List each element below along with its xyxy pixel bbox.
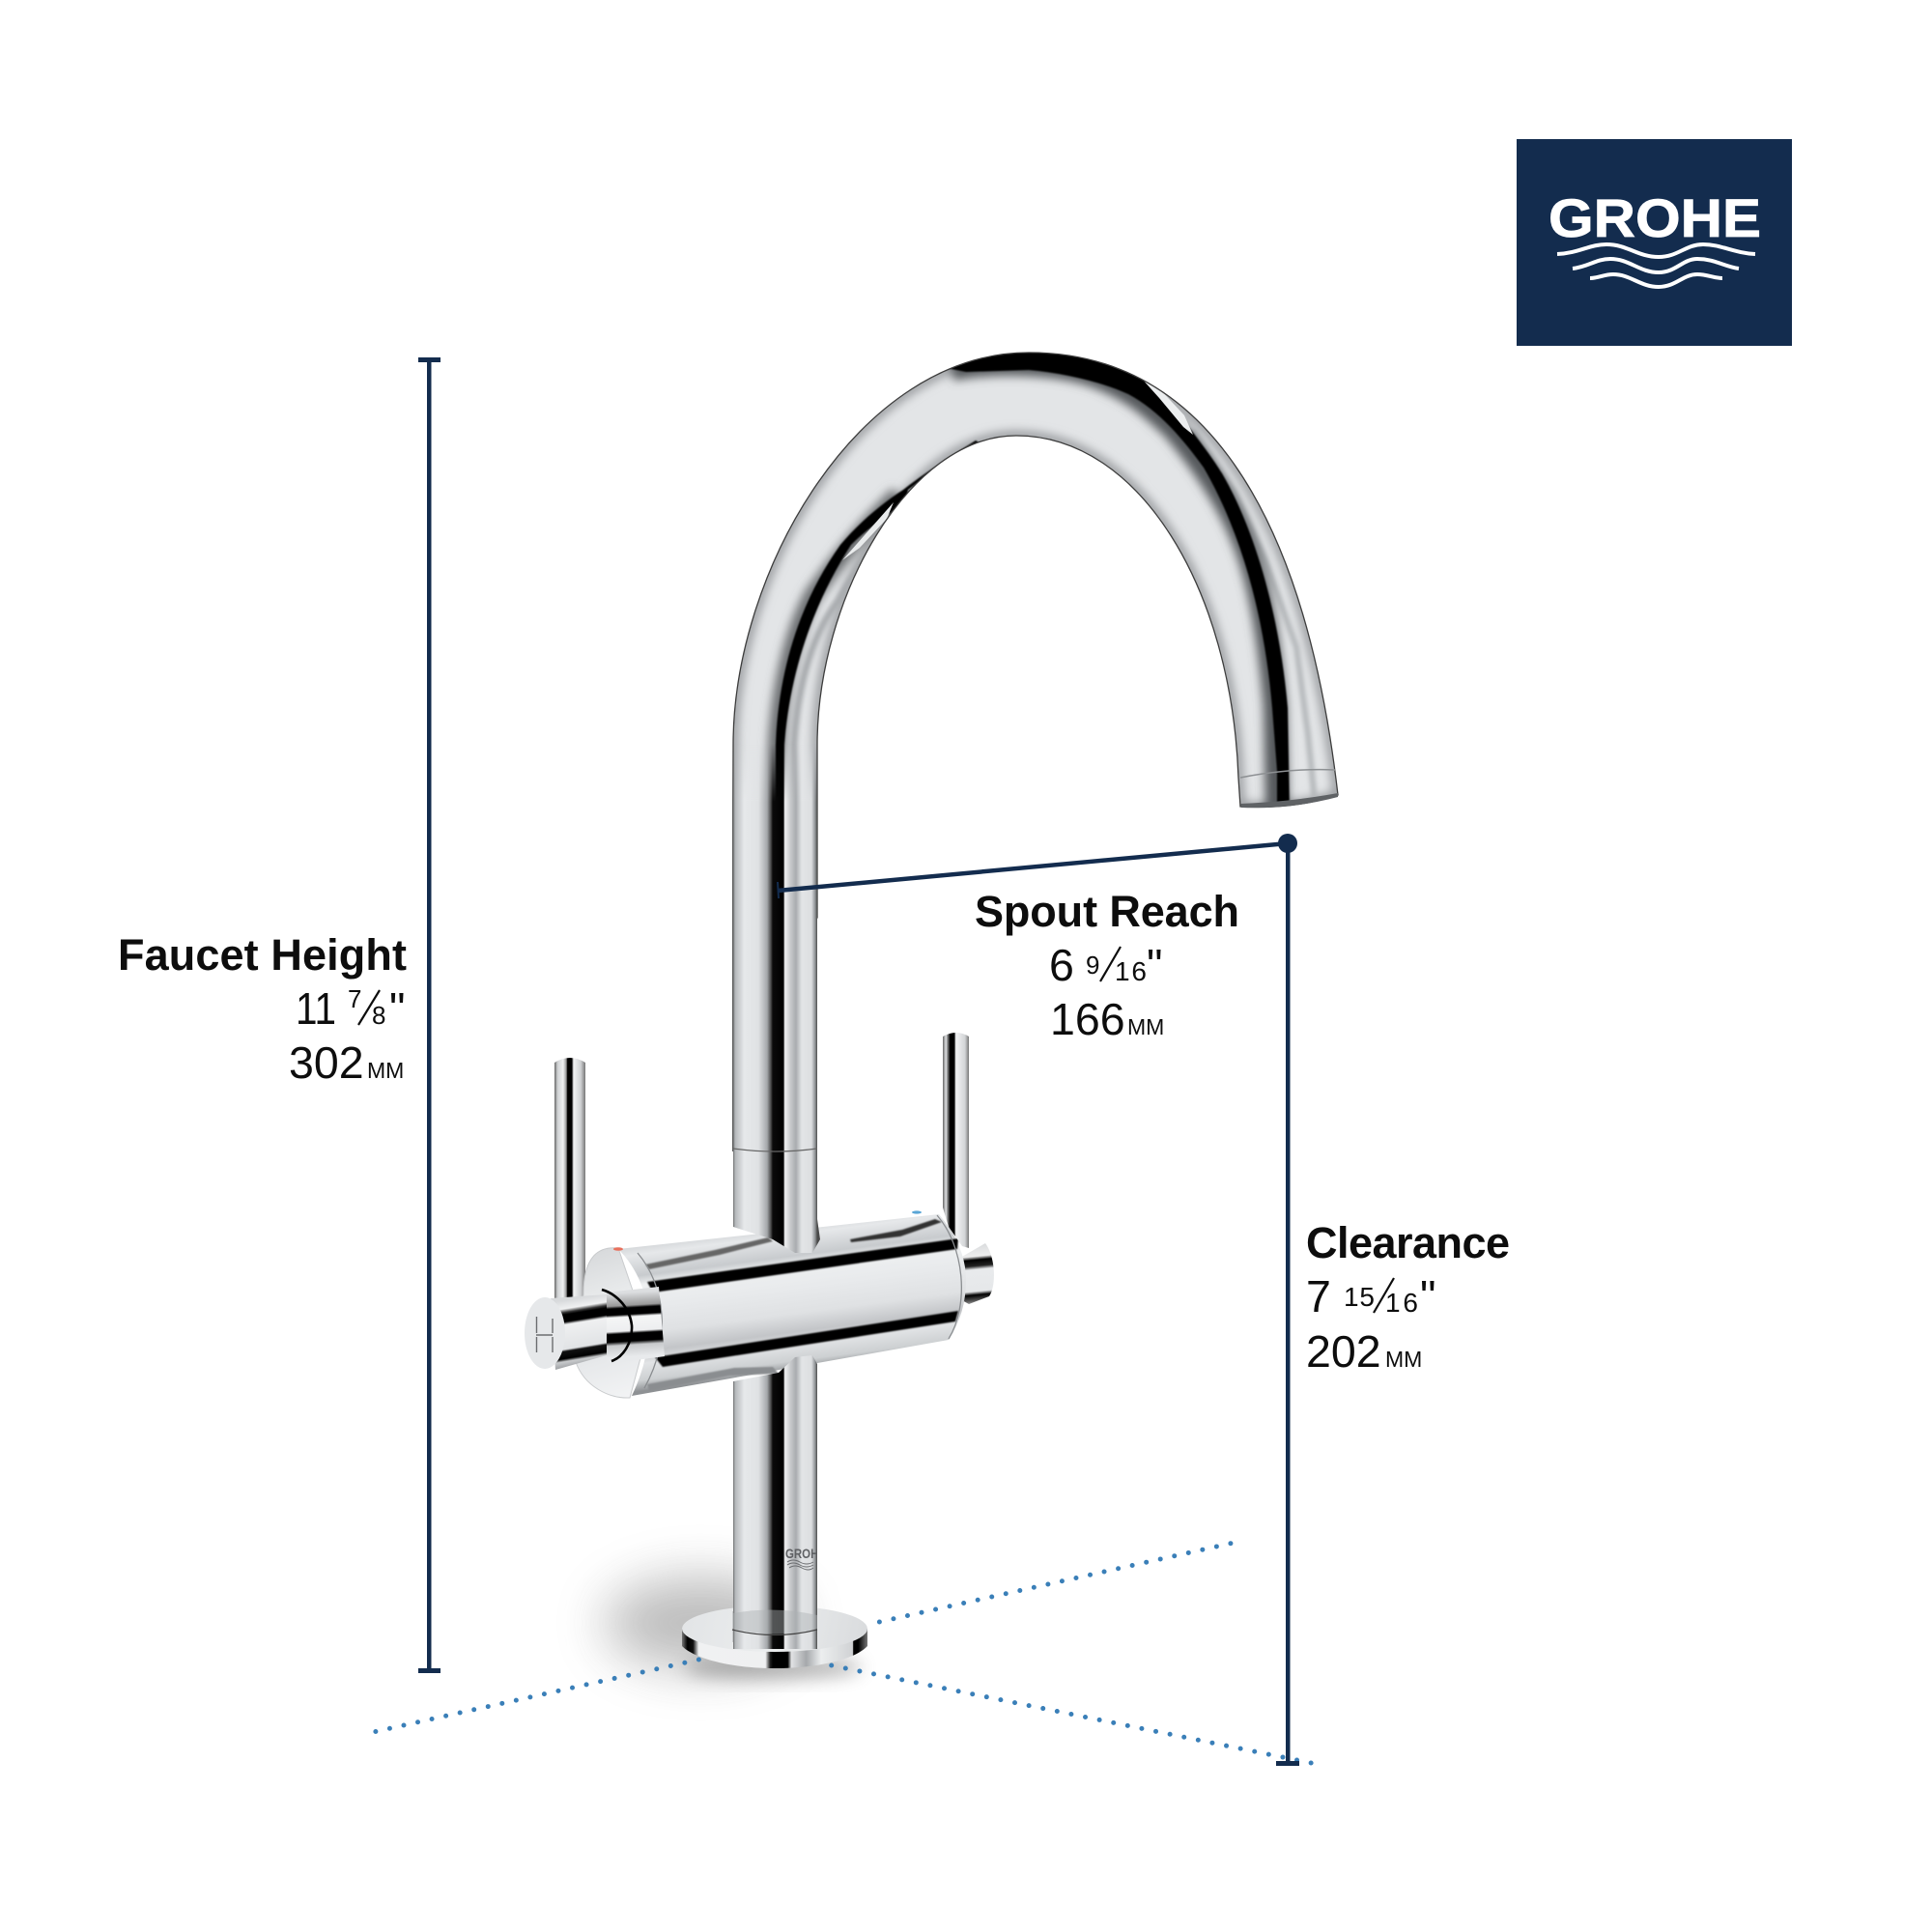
label: spout reach: 9 — [1086, 951, 1099, 980]
floor shadow — [604, 1577, 862, 1680]
label: faucet height: 8 — [372, 1001, 385, 1030]
label: clearance: 15 — [1344, 1282, 1375, 1312]
label: clearance: 7 — [1306, 1271, 1331, 1321]
label: clearance — [1306, 1218, 1510, 1377]
base plate — [682, 1605, 867, 1668]
rear disc — [576, 1248, 647, 1398]
label: spout reach — [975, 887, 1239, 1044]
label: faucet height: 7 — [348, 984, 361, 1013]
label: faucet height: Faucet Height — [118, 930, 407, 980]
label: faucet height: MM — [367, 1058, 404, 1083]
label: clearance: 16 — [1385, 1288, 1418, 1318]
right stub — [960, 1243, 994, 1304]
lower column — [732, 1355, 817, 1649]
left lever — [554, 1058, 585, 1306]
label: clearance: Clearance — [1306, 1218, 1510, 1267]
label: clearance: 202 — [1306, 1326, 1381, 1377]
dotted floor lines — [373, 1543, 1321, 1765]
spout arc — [733, 350, 1338, 927]
label: clearance: " — [1420, 1271, 1436, 1321]
mixer body cylinder — [613, 1210, 966, 1396]
right lever — [943, 1033, 969, 1248]
left knob face with H mark — [525, 1297, 565, 1369]
spout reach dimension line — [778, 834, 1297, 898]
left valve stem — [551, 1287, 665, 1370]
label: spout reach: Spout Reach — [975, 887, 1239, 936]
upper ferrule junction — [733, 1149, 820, 1253]
clearance dimension line — [1276, 843, 1299, 1766]
icon: GROHE logo: GROHE — [1548, 187, 1761, 248]
faucet height dimension line — [418, 357, 440, 1673]
faucet — [525, 350, 1338, 1668]
label: spout reach: 6 — [1049, 940, 1074, 990]
spout tip — [1240, 770, 1338, 808]
icon: GROHE logo — [1517, 139, 1792, 346]
label: clearance: MM — [1385, 1347, 1422, 1372]
label: faucet height: " — [389, 983, 406, 1034]
label: faucet height — [118, 930, 407, 1088]
label: spout reach: MM — [1127, 1014, 1164, 1039]
engraved logo on column — [786, 1549, 816, 1571]
upper column — [732, 744, 817, 1151]
engraved logo on column: GROHE — [785, 1546, 826, 1561]
label: spout reach: 166 — [1050, 994, 1125, 1044]
label: faucet height: 302 — [289, 1037, 364, 1088]
label: spout reach: 16 — [1115, 956, 1147, 986]
label: spout reach: " — [1147, 940, 1163, 990]
label: faucet height: 11 — [296, 983, 336, 1034]
